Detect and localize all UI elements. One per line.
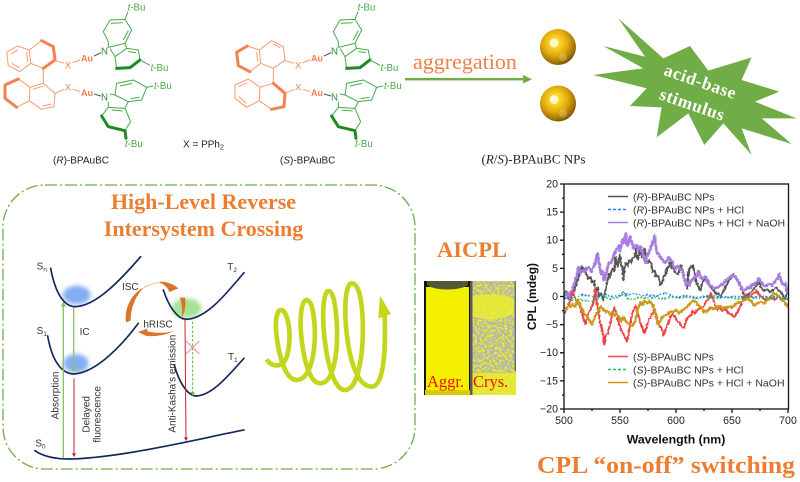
helical light spiral bbox=[267, 283, 391, 390]
caption: NPs: (R/S)-BPAuBC NPs bbox=[482, 152, 585, 166]
carbazole ligands: N bbox=[331, 92, 338, 103]
carbazole ligands bbox=[331, 3, 402, 150]
x axis labels: 700 bbox=[779, 415, 797, 427]
energy level diagram bbox=[35, 257, 244, 459]
gold and linker labels: Au bbox=[311, 53, 323, 63]
y axis labels: 0 bbox=[552, 291, 558, 303]
gold and linker labels: Au bbox=[81, 53, 93, 63]
starburst: acid-base stimulus: stimulus bbox=[657, 84, 728, 125]
level labels: S bbox=[37, 326, 43, 337]
level labels: 1 bbox=[43, 331, 47, 338]
photo: Aggr. and Crys. vials bbox=[424, 281, 516, 395]
glow blobs bbox=[63, 286, 202, 373]
curve: (S) NPs bbox=[564, 289, 788, 345]
caption: (R)-BPAuBC: (R)-BPAuBC bbox=[53, 156, 109, 166]
level labels: S bbox=[37, 261, 43, 272]
legend: R series bbox=[608, 192, 785, 230]
Aggr. vial: Aggr. bbox=[427, 372, 464, 391]
y axis labels: −10 bbox=[540, 347, 558, 359]
gold and linker labels: Au bbox=[311, 88, 323, 98]
level labels: ISC bbox=[122, 282, 139, 293]
starburst: acid-base stimulus: acid-base bbox=[662, 60, 739, 103]
level labels: Anti-Kasha's emission bbox=[167, 335, 178, 433]
level labels: T bbox=[227, 262, 233, 273]
gold and linker labels bbox=[65, 53, 101, 98]
level labels: Absorption bbox=[51, 372, 62, 419]
y axis labels: −5 bbox=[546, 319, 558, 331]
carbazole ligands: N bbox=[331, 47, 338, 58]
gold and linker labels: X bbox=[295, 61, 302, 71]
heading: CPL on-off switching: CPL “on-off” switching bbox=[537, 452, 796, 479]
level labels bbox=[35, 261, 238, 451]
level labels: 2 bbox=[233, 267, 237, 274]
starburst: acid-base stimulus bbox=[593, 18, 797, 155]
transition arrows bbox=[61, 302, 199, 458]
legend: S series: (S)-BPAuBC NPs + HCl bbox=[633, 364, 743, 376]
nanoparticles bbox=[540, 29, 576, 122]
data curves bbox=[564, 234, 788, 345]
level labels: Delayed bbox=[81, 396, 92, 433]
level labels: 1 bbox=[234, 357, 238, 364]
x axis labels: 600 bbox=[667, 415, 685, 427]
level labels: IC bbox=[80, 327, 90, 338]
caption: X = PPh2: 2 bbox=[220, 144, 224, 152]
carbazole ligands: t-Bu bbox=[384, 81, 402, 92]
gold and linker labels: X bbox=[295, 83, 302, 93]
curve: (R) NPs bbox=[564, 248, 788, 300]
x axis labels: 500 bbox=[555, 415, 573, 427]
gold and linker labels: Au bbox=[81, 88, 93, 98]
caption: X = PPh2: X = PPh bbox=[183, 140, 220, 150]
legend: S series bbox=[608, 352, 785, 390]
heading line 2: Intersystem Crossing bbox=[104, 216, 303, 241]
binaphthyl core bbox=[235, 41, 310, 109]
Crys. vial: Crys. bbox=[473, 372, 508, 391]
panel outline bbox=[3, 185, 415, 469]
gold and linker labels: X bbox=[65, 83, 72, 93]
legend: S series: (S)-BPAuBC NPs + HCl + NaOH bbox=[633, 378, 785, 390]
y axis labels: 10 bbox=[546, 234, 558, 246]
gold and linker labels: X bbox=[65, 61, 72, 71]
chart: CPL spectra bbox=[525, 178, 797, 446]
carbazole ligands: t-Bu bbox=[125, 139, 143, 150]
legend: R series: (R)-BPAuBC NPs + HCl bbox=[633, 204, 744, 216]
panel: reverse intersystem crossing bbox=[3, 185, 415, 469]
caption: (S)-BPAuBC: (S)-BPAuBC bbox=[280, 156, 335, 166]
carbazole ligands: t-Bu bbox=[358, 3, 375, 14]
level labels: hRISC bbox=[143, 319, 173, 330]
binaphthyl core bbox=[5, 41, 80, 109]
carbazole ligands: t-Bu bbox=[128, 3, 145, 14]
level labels: T bbox=[228, 352, 234, 363]
carbazole ligands: N bbox=[101, 47, 108, 58]
y axis labels: 15 bbox=[546, 206, 558, 218]
carbazole ligands: t-Bu bbox=[154, 81, 172, 92]
heading: High-Level Reverse bbox=[111, 189, 296, 214]
curve: (R) NPs + HCl + NaOH bbox=[564, 234, 788, 298]
molecule: (R)-BPAuBC bbox=[5, 3, 172, 150]
y axis title: CPL (mdeg) bbox=[525, 263, 539, 330]
gold and linker labels bbox=[295, 53, 331, 98]
carbazole ligands bbox=[101, 3, 172, 150]
y axis labels: −15 bbox=[540, 376, 558, 388]
label: aggregation: aggregation bbox=[413, 49, 517, 74]
y axis labels: −20 bbox=[540, 404, 558, 416]
carbazole ligands: t-Bu bbox=[355, 139, 373, 150]
energy curves bbox=[35, 257, 244, 459]
legend: S series: (S)-BPAuBC NPs bbox=[633, 352, 714, 364]
carbazole ligands: t-Bu bbox=[151, 63, 168, 74]
x axis labels: 550 bbox=[611, 415, 629, 427]
y axis labels: 20 bbox=[546, 178, 558, 190]
carbazole ligands: N bbox=[101, 92, 108, 103]
x axis labels: 650 bbox=[723, 415, 741, 427]
level labels: fluorescence bbox=[93, 386, 104, 443]
x axis title: Wavelength (nm) bbox=[627, 432, 725, 446]
molecule: (S)-BPAuBC bbox=[235, 3, 402, 150]
legend: R series: (R)-BPAuBC NPs bbox=[633, 192, 714, 204]
curve: (S) NPs + HCl bbox=[564, 291, 788, 301]
legend: R series: (R)-BPAuBC NPs + HCl + NaOH bbox=[633, 218, 785, 230]
level labels: S bbox=[35, 439, 42, 450]
carbazole ligands: t-Bu bbox=[381, 63, 398, 74]
ISC / hRISC cycle arrows bbox=[126, 282, 185, 336]
level labels: n bbox=[43, 266, 47, 273]
y axis labels bbox=[540, 178, 558, 416]
arrow: aggregation bbox=[405, 75, 532, 84]
curve: (S) NPs + HCl + NaOH bbox=[564, 293, 788, 326]
heading: AICPL: AICPL bbox=[437, 237, 507, 262]
plot frame and ticks bbox=[560, 184, 788, 413]
level labels: 0 bbox=[42, 444, 46, 451]
y axis labels: 5 bbox=[552, 263, 558, 275]
curve: (R) NPs + HCl bbox=[564, 293, 788, 299]
x axis labels bbox=[555, 415, 797, 427]
